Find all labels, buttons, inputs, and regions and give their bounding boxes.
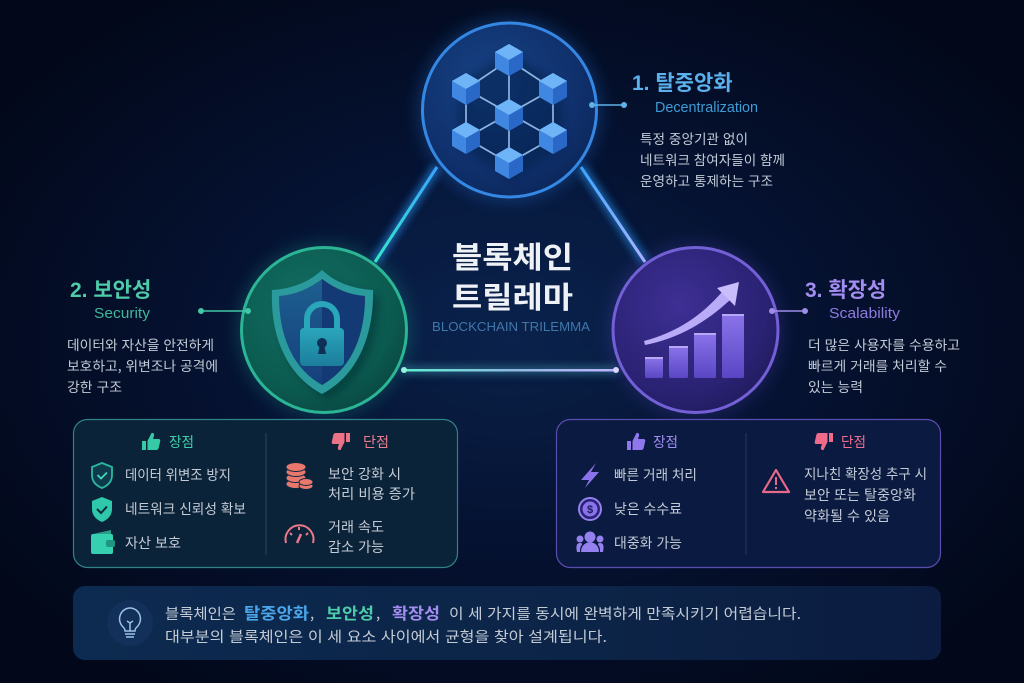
node: decentralization circle xyxy=(420,20,600,200)
text block: scalability: 있는 능력 xyxy=(808,376,863,396)
icon: speed gauge xyxy=(286,525,314,543)
icon: thumbs down xyxy=(815,433,833,450)
text block: security: Security xyxy=(94,306,151,322)
pro item: 대중화 가능 xyxy=(614,533,682,553)
icon: rising bar chart with arrow xyxy=(644,282,744,378)
icon: dollar coin: $ xyxy=(587,504,593,516)
summary line 2: 대부분의 블록체인은 이 세 요소 사이에서 균형을 찾아 설계됩니다. xyxy=(165,626,607,647)
text block: decentralization: Decentralization xyxy=(655,100,758,116)
icon: shield with padlock xyxy=(272,270,373,394)
text block: security: 데이터와 자산을 안전하게 xyxy=(67,334,214,354)
con item: 지나친 확장성 추구 시 xyxy=(804,464,927,484)
icon: lightning bolt xyxy=(581,463,599,488)
pros heading: 장점 xyxy=(169,432,194,452)
text block: scalability xyxy=(805,279,960,396)
icon: filled shield check xyxy=(92,497,112,522)
con item: 보안 또는 탈중앙화 xyxy=(804,485,916,505)
summary line 1: 이 세 가지를 동시에 완벽하게 만족시키기 어렵습니다. xyxy=(449,603,801,624)
icon: thumbs up xyxy=(142,433,160,450)
pro item: 빠른 거래 처리 xyxy=(614,465,697,485)
pro item: 자산 보호 xyxy=(125,533,181,553)
icon: thumbs down xyxy=(332,433,350,450)
summary line 1: 블록체인은 xyxy=(165,603,236,624)
icon: people group xyxy=(576,532,604,552)
cons heading: 단점 xyxy=(363,432,389,452)
title: BLOCKCHAIN TRILEMMA xyxy=(432,320,591,334)
text block: decentralization: 특정 중앙기관 없이 xyxy=(640,128,748,148)
text block: decentralization: 네트워크 참여자들이 함께 xyxy=(640,149,785,169)
icon: light bulb xyxy=(107,600,153,646)
summary line 1: 확장성 xyxy=(392,600,440,624)
text block: security: 2. 보안성 xyxy=(70,279,151,302)
text block: security xyxy=(67,279,218,396)
summary line 1: , xyxy=(310,603,314,624)
text block: scalability: 더 많은 사용자를 수용하고 xyxy=(808,334,960,354)
pros heading: 장점 xyxy=(653,432,678,452)
icon: dollar coin xyxy=(579,498,601,520)
icon: thumbs up xyxy=(627,433,645,450)
connector: scalability xyxy=(770,308,808,314)
text block: scalability: 빠르게 거래를 처리할 수 xyxy=(808,355,947,375)
text block: scalability: Scalability xyxy=(829,306,901,322)
callout: summary bar xyxy=(73,586,941,660)
text block: security: 강한 구조 xyxy=(67,376,122,396)
title: 블록체인 xyxy=(452,233,573,277)
text block: security: 보호하고, 위변조나 공격에 xyxy=(67,355,218,375)
triangle connectors xyxy=(375,167,645,374)
icon: network of cubes xyxy=(452,44,567,179)
panel: security pros and cons xyxy=(74,420,458,568)
title xyxy=(432,233,591,334)
summary line 1 xyxy=(165,600,801,624)
connector: decentralization xyxy=(590,102,626,108)
node: security circle xyxy=(238,244,410,416)
panel: scalability pros and cons xyxy=(556,420,940,568)
con item: 감소 가능 xyxy=(328,537,384,557)
cons heading: 단점 xyxy=(841,432,866,452)
text block: decentralization: 1. 탈중앙화 xyxy=(632,72,733,95)
text block: decentralization xyxy=(632,72,785,190)
node: scalability circle xyxy=(610,244,782,416)
icon: wallet xyxy=(91,530,115,554)
pro item: 데이터 위변조 방지 xyxy=(125,465,231,485)
con item: 약화될 수 있음 xyxy=(804,506,890,526)
icon: warning triangle xyxy=(763,470,789,492)
title: 트릴레마 xyxy=(452,273,573,317)
icon: outlined shield check xyxy=(92,463,112,488)
con item: 거래 속도 xyxy=(328,517,384,537)
summary line 1: 탈중앙화 xyxy=(244,600,309,624)
pro item: 낮은 수수료 xyxy=(614,499,682,519)
icon: coins xyxy=(286,462,313,490)
con item: 처리 비용 증가 xyxy=(328,484,415,504)
pro item: 네트워크 신뢰성 확보 xyxy=(125,499,246,519)
summary line 1: 보안성 xyxy=(326,600,374,624)
text block: decentralization: 운영하고 통제하는 구조 xyxy=(640,170,773,190)
text block: scalability: 3. 확장성 xyxy=(805,279,886,302)
summary line 1: , xyxy=(376,603,380,624)
con item: 보안 강화 시 xyxy=(328,464,401,484)
connector: security xyxy=(198,308,250,314)
